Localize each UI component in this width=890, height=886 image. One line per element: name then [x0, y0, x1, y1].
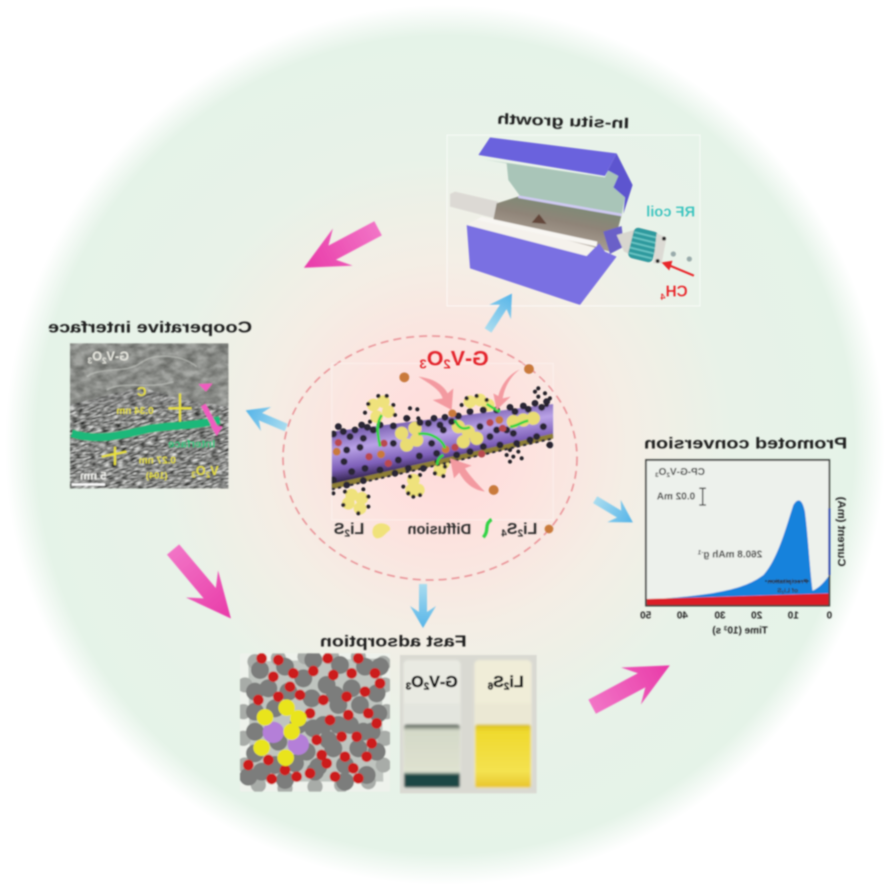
heading: G-V2O3: 3: [419, 357, 427, 372]
micrograph labels: 3: [191, 471, 196, 480]
label: Li2S6: 6: [487, 682, 493, 693]
panel: G-V2O3 centre schematic: [332, 346, 553, 540]
TEM micrograph: [69, 342, 230, 490]
x axis labels: 20: [751, 611, 762, 622]
arrow: pink top: [294, 210, 388, 286]
x axis labels: Time (10: [727, 626, 768, 637]
black cluster rims: [333, 388, 550, 513]
black carbon dots: [333, 402, 550, 485]
frame: [332, 363, 553, 520]
heading: G-V2O3: G-V: [451, 346, 489, 370]
dashed centre ellipse: [283, 336, 577, 580]
micrograph labels: Interface: [168, 438, 215, 450]
arrow: pink bottom: [582, 647, 680, 725]
micrograph labels: O: [92, 350, 102, 364]
legend: 4: [501, 529, 507, 540]
panel frame: [447, 135, 700, 306]
annotations: -1: [697, 549, 703, 556]
crystal structure model: [236, 649, 394, 796]
micrograph labels: 3: [87, 356, 92, 365]
label: RF coil: RF coil: [646, 205, 695, 221]
annotations: 3: [655, 472, 659, 479]
heading: promoted conversion: Promoted conversion: [644, 435, 847, 452]
legend: S: [333, 521, 344, 538]
y axis label: Current (mA): [835, 497, 847, 567]
x axis labels: 40: [676, 611, 688, 622]
arrow: blue to cooperative interface: [241, 398, 291, 440]
heading: in-situ growth: In-situ growth: [497, 111, 629, 132]
legend: S: [507, 521, 518, 538]
annotations: [655, 467, 808, 595]
x axis labels: 30: [714, 611, 726, 622]
micrograph labels: C: [136, 384, 146, 399]
red base band: [647, 593, 829, 605]
precipitation divider: [765, 579, 810, 583]
micrograph labels: G-V: [106, 350, 129, 364]
x axis labels: 50: [640, 611, 651, 622]
annotations: S: [777, 587, 782, 594]
rod: [332, 404, 553, 488]
label: Li2S6: Li: [509, 674, 524, 691]
green diffusion paths: [378, 404, 528, 465]
label: Li2S6: 2: [503, 682, 509, 693]
label: CH4: CH: [666, 284, 688, 301]
panel: fast adsorption: [236, 634, 537, 796]
annotations: Precipitation: [767, 578, 808, 585]
yellow Li2S clusters behind rod: [348, 400, 488, 508]
arrow: blue to promoted conversion: [588, 489, 640, 533]
micrograph labels: 0.27 nm: [139, 455, 176, 466]
label: Li2S6: S: [493, 674, 504, 691]
micrograph labels: 5 nm: [80, 470, 107, 482]
micrograph labels: [80, 350, 219, 482]
yellow Li2S clusters on rod: [402, 418, 533, 445]
vial photograph: [400, 655, 537, 793]
label: G-V2O3: 3: [405, 682, 411, 693]
x axis labels: [640, 611, 832, 637]
annotations: 2: [666, 472, 670, 479]
legend: [333, 519, 553, 540]
arrow: blue to in-situ growth: [477, 286, 523, 338]
label: G-V2O3: O: [411, 674, 424, 691]
micrograph labels: 2: [205, 471, 210, 480]
heading: G-V2O3: O: [427, 346, 443, 370]
legend: 2: [517, 529, 523, 540]
legend: Li: [523, 521, 537, 538]
legend: Li: [350, 521, 364, 538]
x axis labels: 0: [826, 611, 832, 622]
label: G-V2O3: G-V: [429, 674, 458, 691]
arrow: pink left: [157, 536, 247, 632]
label: G-V2O3: 2: [423, 682, 429, 693]
panel: in-situ growth: [447, 111, 700, 306]
panel: cooperative interface: [36, 320, 275, 543]
micrograph labels: O: [196, 464, 206, 478]
free Li2S4 atoms: [399, 364, 534, 495]
annotations: O: [658, 467, 666, 478]
annotations: of Li: [784, 587, 798, 594]
x axis labels: s): [712, 626, 724, 637]
annotations: CP-G-V: [670, 467, 705, 478]
heading: fast adsorption: Fast adsorption: [320, 634, 467, 651]
blue capacity area: [647, 500, 829, 605]
micrograph labels: (104): [146, 470, 168, 480]
annotations: 0.02 mA: [657, 492, 695, 503]
micrograph labels: 0.34 nm: [116, 406, 154, 417]
x axis labels: 3: [723, 625, 727, 632]
legend: 2: [344, 529, 350, 540]
plot background: [646, 460, 829, 606]
annotations: 260.8 mAh g: [703, 550, 762, 561]
furnace illustration: [450, 137, 695, 305]
heading: cooperative interface: Cooperative interface: [48, 320, 252, 337]
panel: promoted conversion chart: [640, 435, 847, 637]
micrograph labels: 2: [101, 356, 106, 365]
plot frame: [646, 460, 829, 606]
label: CH4: 4: [660, 292, 666, 302]
heading: G-V2O3: 2: [443, 357, 451, 372]
micrograph labels: V: [210, 464, 219, 478]
arrow: blue to fast adsorption: [410, 584, 436, 628]
annotations: 2: [781, 590, 784, 595]
legend: Diffusion: [408, 522, 471, 538]
pink approach arrows: [418, 369, 520, 492]
red and orange atoms: [338, 423, 503, 463]
x axis labels: 10: [787, 611, 799, 622]
